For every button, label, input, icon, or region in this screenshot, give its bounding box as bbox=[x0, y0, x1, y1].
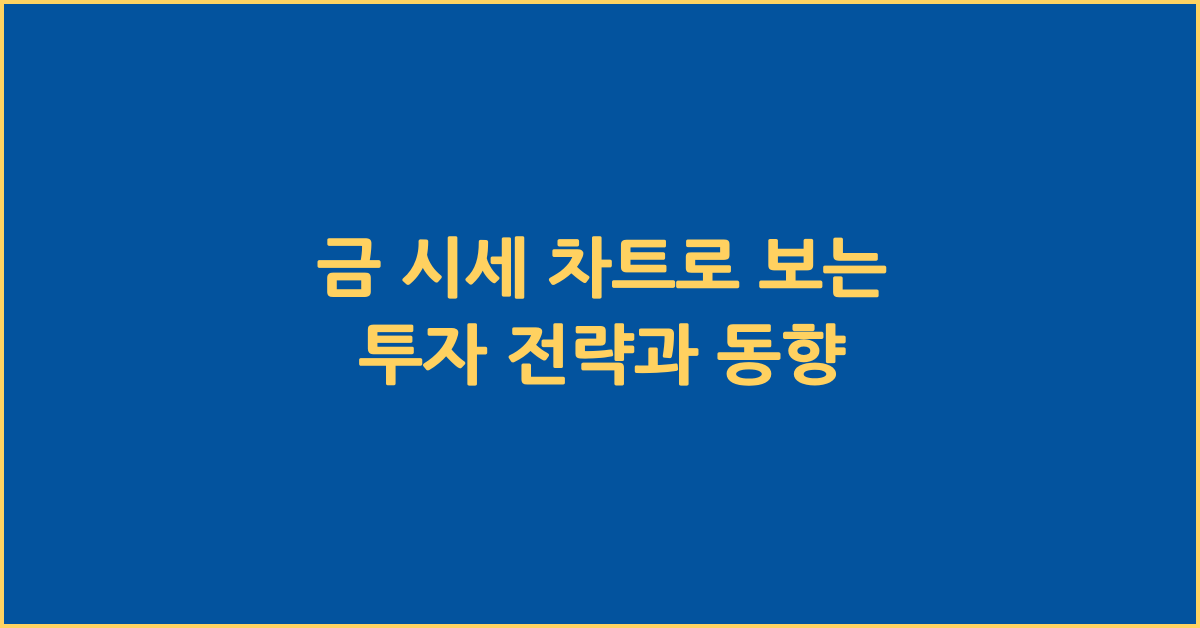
title: 투자 전략과 동향 bbox=[359, 320, 845, 392]
title: 금 시세 차트로 보는 bbox=[317, 233, 887, 305]
